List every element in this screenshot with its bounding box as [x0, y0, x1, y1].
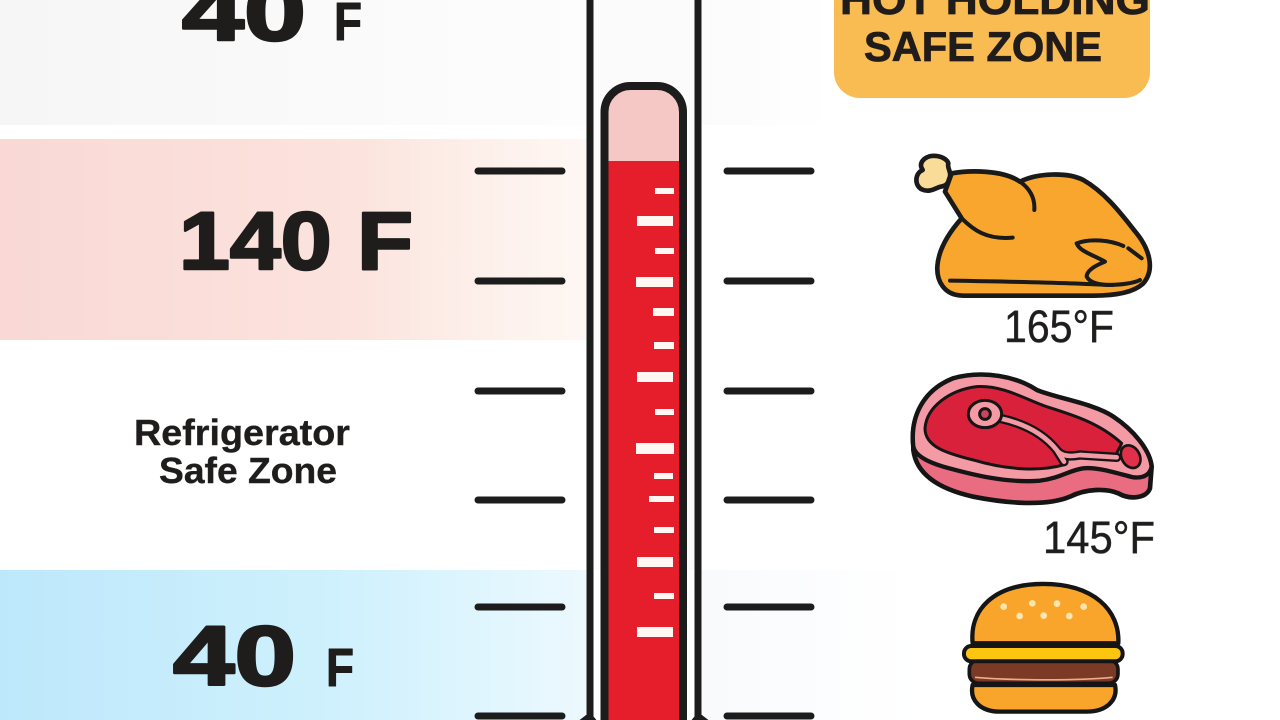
icon: hamburger [964, 584, 1123, 712]
heading: 40 F bottom [173, 609, 354, 703]
heading: 140 F: 140 F [179, 196, 413, 287]
icon: roast turkey [916, 156, 1150, 296]
text block: refrigerator safe zone [134, 412, 350, 491]
text block: refrigerator safe zone: Safe Zone [159, 450, 337, 491]
thermometer white scale marks [636, 188, 674, 637]
label: 145°F: 145°F [1043, 512, 1155, 563]
left tick marks [478, 171, 562, 716]
callout: hot holding safe zone [834, 0, 1150, 98]
text block: refrigerator safe zone: Refrigerator [134, 412, 350, 453]
heading: 40 F bottom: 40 [173, 609, 296, 703]
heading: 40 F bottom: F [326, 638, 354, 698]
label: 165°F: 165°F [1004, 301, 1114, 352]
panel: right top tint [702, 0, 832, 125]
thermometer red column [606, 161, 681, 720]
icon: steak [913, 375, 1152, 503]
thermometer [577, 0, 711, 720]
heading: 40 F top [182, 0, 362, 58]
thermometer outer tube [577, 0, 711, 720]
panel: hot danger band [0, 139, 586, 340]
thermometer empty top [604, 86, 683, 720]
right tick marks [727, 171, 811, 716]
panel: right bottom tint [702, 570, 912, 720]
panel: top grey band [0, 0, 586, 125]
callout: hot holding safe zone: SAFE ZONE [864, 23, 1102, 70]
thermometer inner tube outline [604, 86, 683, 720]
panel: cold blue band [0, 570, 586, 720]
